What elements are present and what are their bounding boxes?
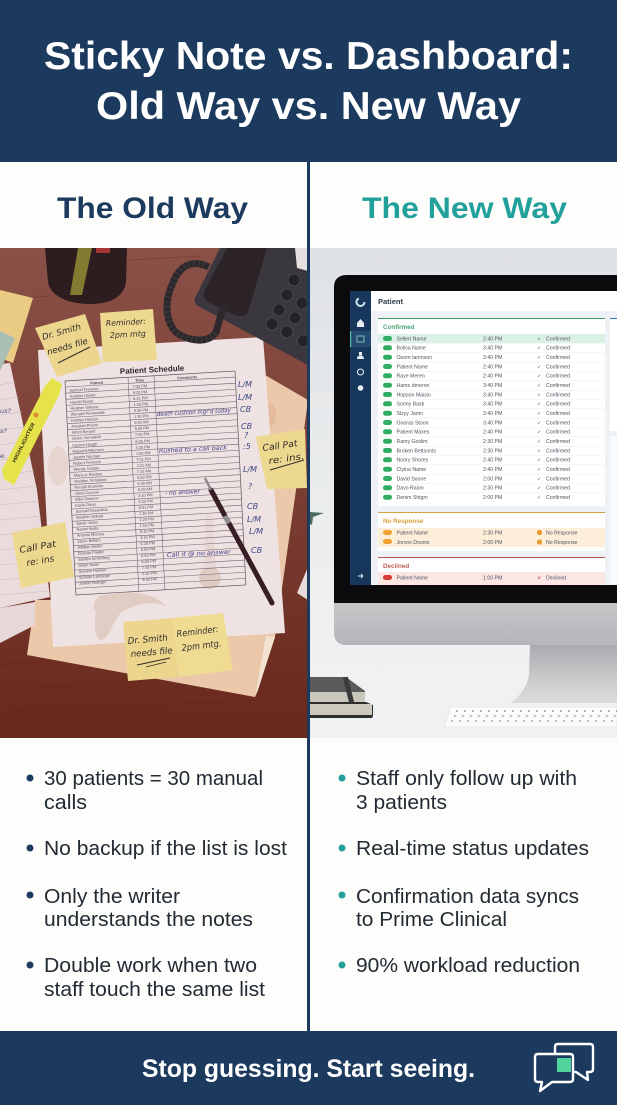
patient schedule table: 4:25 PM [135,444,150,450]
patient schedule table: Patient Schedule [120,364,185,376]
patient schedule table: 8:30 PM [134,407,148,413]
handwritten margin codes: CB [247,502,258,511]
panel: confirmed: ✓ [537,355,541,361]
sticky note: bottom Reminder: 2pm mtg. [181,639,222,654]
patient schedule table: Wendell Perriwinkle [71,410,105,417]
panel: confirmed: 2:30 PM [483,439,502,445]
panel: confirmed: 2:00 PM [483,476,502,482]
coffee stains [48,446,221,640]
patient schedule table: Jasmin Norman [73,453,100,460]
sticky note: Reminder 2pm mtg: Reminder: [106,317,146,328]
patient schedule table: 8:20 AM [138,486,152,492]
panel: confirmed: Hopson Maisio [396,392,431,398]
handwritten margin codes [238,380,263,555]
patient schedule table [65,364,246,595]
list: old way bullets: Only the writer [44,885,180,908]
handwritten table notes: - no answer [165,488,201,497]
panel: confirmed: 2:40 PM [483,467,502,473]
patient schedule table: 9:30 AM [137,480,152,486]
list: old way bullets [26,767,287,1001]
list: old way bullets: No backup if the list is lost [44,837,287,860]
panel: confirmed: Broken Bettsonts [396,448,436,454]
handwritten table notes: Call it @ no answer [167,549,232,559]
patient schedule table: 7:10 PM [142,564,156,570]
patient schedule table: Samuel Fremont [69,386,99,393]
patient schedule table: 6:25 PM [135,438,150,444]
panel: confirmed: Ouom Iamnson [396,355,432,361]
patient schedule table: 1:30 PM [139,510,154,516]
panel: confirmed: ✓ [537,430,541,436]
panel: confirmed: 2:40 PM [483,430,502,436]
sticky note: bottom Reminder: Reminder: [176,625,219,640]
keyboard [444,707,617,727]
list: new way bullets: Confirmation data syncs [356,885,579,908]
panel: confirmed: Confirmed [546,411,570,417]
sticky note: bottom Reminder [173,613,233,677]
panel: confirmed: Confirmed [546,439,570,445]
patient schedule table: 7:00 PM [132,383,147,389]
panel: confirmed: Confirmed [546,467,570,473]
panel: confirmed: ✓ [537,336,541,342]
handwritten table notes: Rushed to a call back [159,444,228,455]
patient schedule table: Sorlean Lamonge [79,573,110,580]
panel: confirmed: Patient Name [396,364,428,370]
title banner [0,0,617,162]
panel: no response [378,512,605,551]
sticky note: top-left stack [0,290,33,371]
lined paper at left: us? [0,407,12,415]
patient schedule table: Dawn Swan [78,562,99,568]
lined paper at left: e. [0,452,6,460]
patient schedule table: Sarah Jones [76,519,98,526]
panel: no response: No Response [546,540,578,546]
icon: pen [205,478,272,603]
panel: confirmed: Hame dmeron [396,383,429,389]
patient schedule table: Maxwell Albertson [72,447,104,454]
panel: confirmed: Noory Shores [396,458,429,464]
patient schedule table: Ronald Shannon [74,483,104,490]
sticky note: Dr. Smith needs file: needs file [46,337,89,358]
patient schedule table: Kayla Dixon [75,502,96,508]
handwritten margin codes: L/M [247,515,261,524]
panel: confirmed: ✓ [537,346,541,352]
panel: confirmed: Confirmed [546,383,570,389]
handwritten margin codes: L/M [238,393,252,402]
patient schedule table: 6:20 PM [140,540,155,546]
patient schedule table: Jason Bellam [77,537,101,544]
panel: confirmed: 2:40 PM [483,364,502,370]
icon: chat bubbles [535,1044,593,1091]
dashboard sidebar [350,291,371,585]
panel: confirmed: ✓ [537,411,541,417]
sticky note: Dr. Smith needs file [35,314,102,377]
patient schedule table: Heather Simone [70,404,99,411]
plant leaf [310,512,324,525]
panel: confirmed: ✓ [537,486,541,492]
list: old way bullets: 30 patients = 30 manual [44,767,263,790]
patient schedule table: 3:30 PM [142,576,157,582]
footer banner [0,1031,617,1105]
patient schedule table: Harold Noam [70,398,93,405]
sticky note: Call Pat left [12,522,74,588]
panel: confirmed: Confirmed [546,392,570,398]
patient schedule table: Naomi Ayala [76,525,99,532]
monitor body [334,275,617,645]
title banner: Sticky Note vs. Dashboard: [44,35,573,78]
panel: confirmed: Confirmed [546,402,570,408]
title banner: Old Way vs. New Way [96,85,521,128]
panel: confirmed: Davo Raion [396,486,424,492]
panel: confirmed: 3:40 PM [483,411,502,417]
panel: no response: No Response [546,530,578,536]
list: old way bullets: Double work when two [44,954,257,977]
panel: no response: Jorvox Dooms [396,540,430,546]
lined paper at left: s? [0,427,7,435]
patient schedule table: 9:00 AM [134,419,149,425]
panel: confirmed: 2:30 PM [483,448,502,454]
dashboard screen [350,291,617,585]
panel: confirmed: 2:40 PM [483,374,502,380]
sticky note: Reminder 2pm mtg [100,309,157,362]
panel: confirmed: 3:40 PM [483,420,502,426]
heading: the old way: The Old Way [57,192,248,225]
list: new way bullets: Staff only follow up with [356,767,577,790]
panel: confirmed: ✓ [537,374,541,380]
panel: confirmed: 3:40 PM [483,402,502,408]
panel: confirmed: Patient Maxes [396,430,430,436]
sticky note: Call Pat right [256,429,307,489]
panel: confirmed: Bolisa Name [396,346,426,352]
panel: confirmed: Confirmed [546,420,570,426]
icon: desk phone [167,248,309,365]
sticky note: bottom Dr. Smith [123,618,177,681]
list: new way bullets [338,767,589,977]
panel: confirmed: 2:30 PM [483,486,502,492]
panel: declined [378,557,605,585]
handwritten margin codes: CB [241,422,252,431]
list: new way bullets: Real-time status updates [356,837,589,860]
panel: confirmed: ✓ [537,439,541,445]
patient schedule table: 1:20 PM [139,516,154,522]
patient schedule table: 7:00 PM [135,431,150,437]
panel: confirmed: Confirmed [383,324,415,331]
patient schedule table: Sheldon Templeton [74,477,107,484]
patient schedule table: 1:15 PM [139,522,154,528]
patient schedule table: 9:10 PM [140,528,154,534]
patient schedule table: 6:50 PM [141,552,156,558]
monitor stand [510,645,617,703]
icon: yellow highlighter [2,378,62,485]
side panels cut off at edge [610,318,617,585]
handwritten margin codes: CB [240,405,251,414]
handwritten margin codes: L/M [243,465,257,474]
sticky note: Reminder 2pm mtg: 2pm mtg [110,329,146,340]
panel: confirmed: 2:00 PM [483,495,502,501]
panel: no response: Patient Name [396,530,428,536]
patient schedule table: Grace Vornatesh [72,434,101,441]
panel: confirmed: ✓ [537,448,541,454]
panel: confirmed: Sellert Name [396,336,427,342]
panel: confirmed: Confirmed [546,486,570,492]
list: old way bullets: calls [44,791,87,814]
patient schedule table: Susann Hansen [79,567,106,574]
patient schedule table: 5:50 PM [137,474,152,480]
panel: confirmed: 3:40 PM [483,346,502,352]
list: old way bullets: understands the notes [44,908,253,931]
panel: declined: Declined [383,563,409,570]
sticky note: bottom Dr. Smith: Dr. Smith [127,634,168,647]
panel: declined: Declined [546,576,566,582]
patient schedule table: Time [135,377,145,383]
panel: confirmed: David Soorie [396,476,426,482]
panel: confirmed: 3:40 PM [483,355,502,361]
photo: cluttered desk with sticky notes [0,248,309,738]
patient schedule table: Duncan Fowler [78,549,105,556]
patient schedule table: 1:30 PM [134,413,149,419]
panel: confirmed: Confirmed [546,458,570,464]
sticky note: Call Pat right: Call Pat [262,439,299,454]
panel: no response: 2:00 PM [483,540,502,546]
patient schedule table: 4:30 PM [138,498,153,504]
panel: confirmed: Confirmed [546,476,570,482]
panel: declined: Patient Name [396,576,428,582]
patient schedule table: Carson Hough [72,441,97,448]
sticky note: Dr. Smith needs file: Dr. Smith [41,322,82,343]
panel: confirmed: ✓ [537,476,541,482]
patient schedule table: 9:20 PM [133,389,147,395]
list: new way bullets: to Prime Clinical [356,908,507,931]
sticky note: Call Pat right: re: ins. [268,452,305,467]
patient schedule table: Stephen Hobart [76,513,104,520]
panel: confirmed: Confirmed [546,346,570,352]
panel: no response: No Response [383,518,424,525]
patient schedule table: Comments [177,374,197,380]
patient schedule table: Patient [90,380,104,386]
list: new way bullets: 90% workload reduction [356,954,580,977]
panel: confirmed: Sonny Bask [396,402,425,408]
panel: confirmed: Confirmed [546,336,570,342]
panel: confirmed: ✓ [537,495,541,501]
panel: confirmed: ✓ [537,383,541,389]
patient schedule table: 1:00 PM [133,401,148,407]
handwritten margin codes: ? [244,431,249,440]
schedule paper [38,337,285,647]
panel: confirmed: ✓ [537,392,541,398]
panel: confirmed: 2:40 PM [483,336,502,342]
panel: confirmed: Ramy Goslim [396,439,428,445]
patient schedule table: 3:15 PM [140,534,155,540]
patient schedule table: Robert Frennick [73,459,101,466]
handwritten margin codes: ? [248,482,253,491]
patient schedule table: Addilan Martin [77,543,102,550]
icon: yellow highlighter: HIGHLIGHTER [11,422,37,464]
panel: confirmed: Denim Shigm [396,495,428,501]
patient schedule table: 1:00 PM [136,450,151,456]
panel: confirmed: Confirmed [546,448,570,454]
handwritten margin codes: L/M [249,527,263,536]
patient schedule table: 7:01 PM [136,456,151,462]
footer banner: Stop guessing. Start seeing. [142,1055,475,1083]
patient schedule table: Kathlyn Hanson [71,416,99,423]
panel: confirmed: Confirmed [546,374,570,380]
sticky note: bottom Dr. Smith: needs file [130,646,174,660]
patient schedule table: Annabel Pharm [71,422,98,429]
lined paper at left [0,363,50,643]
panel: no response: 2:30 PM [483,530,502,536]
photo: monitor on a white desk [310,248,617,738]
patient schedule table: 8:01 PM [139,504,153,510]
patient schedule table: 7:10 AM [137,468,151,474]
handwritten margin codes: :5 [243,442,251,451]
dashboard header [371,291,617,311]
panel: confirmed: ✓ [537,458,541,464]
sticky note: Call Pat left: Call Pat [19,540,57,556]
patient schedule table: Wendy Cooper [73,465,100,472]
list: old way bullets: staff touch the same list [44,978,265,1001]
panel: confirmed [378,318,605,506]
handwritten margin codes: L/M [238,380,252,389]
patient schedule table: Adam Benard [71,428,96,435]
handwritten margin codes: CB [251,546,262,555]
panel: confirmed: Confirmed [546,355,570,361]
patient schedule table: Jared Cannon [75,489,99,496]
heading: the new way: The New Way [362,192,567,225]
patient schedule table: 2:21 AM [136,462,151,468]
patient schedule table: Samuel Rosenthal [76,507,108,514]
panel: declined: 1:00 PM [483,576,502,582]
patient schedule table: Sandra Armstrong [78,555,110,562]
sticky note: Call Pat left: re: ins [26,554,55,569]
patient schedule table: Elliot Dawson [75,495,99,502]
panel: confirmed: Slzyy Jamn [396,411,423,417]
patient schedule table: 2:30 PM [142,570,157,576]
icon: pen cup [45,248,127,304]
panel: confirmed: ✓ [537,467,541,473]
panel: confirmed: Clyina Name [396,467,426,473]
panel: confirmed: ✓ [537,420,541,426]
center divider [307,162,310,1031]
panel: confirmed: ✓ [537,402,541,408]
panel: confirmed: 2:40 PM [483,458,502,464]
panel: confirmed: ✓ [537,364,541,370]
list: new way bullets: 3 patients [356,791,447,814]
patient schedule table: 6:00 PM [141,558,156,564]
panel: confirmed: 3:40 PM [483,392,502,398]
patient schedule table: Jarliah Nolinger [79,579,107,586]
patient schedule table: Antonio Morrow [77,531,104,538]
panel: confirmed: Gooras Stoon [396,420,429,426]
patient schedule table: 5:00 PM [141,546,155,552]
handwritten table notes: death cushion mgr'd today [157,407,231,418]
panel: confirmed: 3:40 PM [483,383,502,389]
patient schedule table: 2:10 PM [138,492,153,498]
panel: confirmed: Confirmed [546,495,570,501]
notebooks [310,677,373,718]
manila folder [27,375,308,697]
panel: confirmed: Confirmed [546,364,570,370]
patient schedule table: 5:00 PM [134,425,149,431]
patient schedule table: Andrew Hunter [70,392,97,399]
panel: confirmed: Confirmed [546,430,570,436]
dashboard header: Patient [378,297,404,306]
panel: declined: ✕ [537,576,541,582]
handwritten table notes [157,407,232,559]
patient schedule table: Maria d. Bandas [74,471,102,478]
patient schedule table: 6:31 PM [133,395,148,401]
panel: confirmed: Raye Meren [396,374,425,380]
